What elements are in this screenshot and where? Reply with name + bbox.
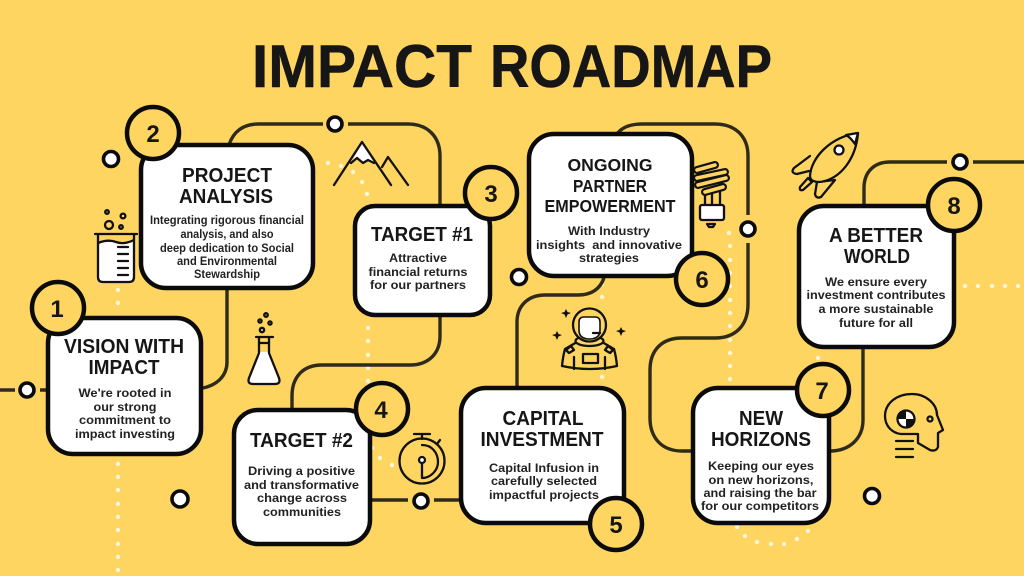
heading (711, 408, 811, 451)
badge: 3 (465, 167, 517, 219)
heading: TARGET #2 (250, 430, 353, 452)
badge: 4 (356, 383, 408, 435)
description: commitment to (79, 413, 171, 427)
description: We're rooted in (78, 386, 172, 400)
description: financial returns (368, 265, 468, 279)
description: and Environmental (177, 254, 277, 268)
panel: step 4 target 2 (234, 410, 370, 544)
description (806, 275, 946, 330)
heading: ANALYSIS (179, 186, 273, 208)
description (701, 459, 819, 513)
heading: PARTNER (573, 176, 647, 196)
description: for our partners (370, 278, 466, 292)
badge: 2 (127, 107, 179, 159)
panel: step 5 capital investment (461, 388, 624, 523)
panel: step 7 new horizons (693, 388, 829, 523)
description: Capital Infusion in (489, 461, 599, 475)
badge: 6 (676, 253, 728, 305)
badge: 3: 3 (484, 181, 498, 208)
heading (480, 408, 604, 451)
description: on new horizons, (708, 473, 814, 487)
badge: 2: 2 (146, 121, 160, 148)
description: our strong (94, 400, 156, 414)
badge: 8 (928, 179, 980, 231)
icon: beaker (95, 210, 137, 282)
description: a more sustainable (818, 302, 934, 316)
icon: head with target (885, 394, 943, 457)
heading: TARGET #1 (371, 224, 473, 246)
heading: INVESTMENT (480, 429, 604, 451)
badge: 8: 8 (947, 193, 961, 220)
title: ROADMAP (490, 33, 772, 100)
description: We ensure every (825, 275, 927, 289)
heading: HORIZONS (711, 429, 811, 451)
description: impact investing (75, 427, 175, 441)
description: and transformative (244, 478, 359, 492)
description: Stewardship (194, 267, 260, 281)
heading: EMPOWERMENT (544, 196, 676, 216)
panel: step 6 ongoing partner empowerment (529, 134, 692, 276)
roadmap connector lines (0, 124, 1024, 500)
marker rings (20, 117, 967, 508)
description: strategies (579, 251, 639, 265)
description: deep dedication to Social (160, 241, 294, 255)
description: Driving a positive (248, 464, 355, 478)
description: communities (263, 505, 341, 519)
description: for our competitors (701, 499, 819, 513)
description (368, 251, 468, 292)
description: and raising the bar (704, 486, 817, 500)
icon: flask (248, 313, 280, 384)
heading (64, 336, 184, 379)
badge: 5 (590, 498, 642, 550)
badge: 7: 7 (815, 378, 829, 405)
heading: IMPACT (88, 357, 160, 379)
description: analysis, and also (180, 227, 274, 241)
description: impactful projects (489, 488, 599, 502)
heading: WORLD (844, 246, 910, 268)
badge: 1 (32, 282, 84, 334)
badge: 7 (797, 364, 849, 416)
heading (544, 155, 676, 216)
description: Integrating rigorous financial (150, 213, 304, 227)
badge: 4: 4 (374, 397, 388, 424)
heading (179, 165, 273, 208)
heading: A BETTER (829, 225, 924, 247)
description: Attractive (389, 251, 447, 265)
description: carefully selected (491, 474, 597, 488)
description: future for all (839, 316, 913, 330)
panel: step 3 target 1 (355, 206, 490, 315)
badge: 1: 1 (50, 296, 64, 323)
dotted white route (116, 161, 1020, 572)
panel: step 2 project analysis (141, 145, 313, 288)
description (75, 386, 175, 441)
heading (829, 225, 924, 268)
description: Keeping our eyes (708, 459, 814, 473)
description: change across (257, 491, 347, 505)
description (536, 224, 682, 265)
heading: PROJECT (182, 165, 272, 187)
icon: astronaut (552, 308, 626, 369)
heading: CAPITAL (502, 408, 584, 430)
badge: 5: 5 (609, 512, 623, 539)
heading: ONGOING (568, 155, 652, 175)
panel: step 8 a better world (799, 206, 954, 347)
title (252, 33, 772, 100)
title: IMPACT (252, 33, 472, 100)
description (244, 464, 359, 519)
icon: stopwatch (400, 434, 444, 484)
heading: NEW (739, 408, 783, 430)
icon: light bulb (697, 165, 726, 227)
description (489, 461, 599, 502)
icon: rocket (793, 133, 858, 198)
description (150, 213, 304, 281)
badge: 6: 6 (695, 267, 709, 294)
panel: step 1 vision with impact (48, 318, 201, 454)
icon: mountains (334, 142, 408, 185)
description: With Industry (568, 224, 650, 238)
heading: VISION WITH (64, 336, 184, 358)
description: insights and innovative (536, 238, 682, 252)
description: investment contributes (806, 288, 946, 302)
